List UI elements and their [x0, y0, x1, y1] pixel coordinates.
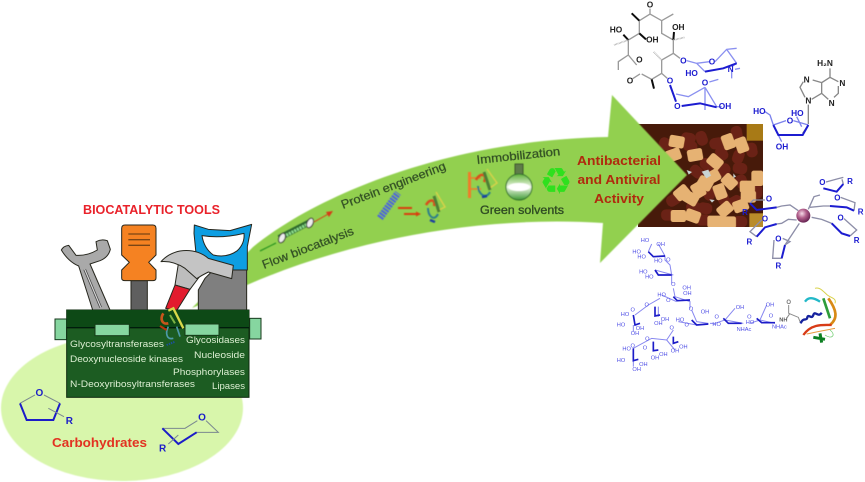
- chart: glycoprotein glycan tree: OH: [679, 344, 688, 350]
- chart: protein ribbon conjugate: [779, 288, 835, 343]
- icon: pyranose ring: O: [198, 413, 206, 424]
- chart: glycoprotein glycan tree: OH: [636, 326, 644, 332]
- chart: glycoprotein glycan tree: HO: [639, 269, 648, 275]
- chart: glycoprotein glycan tree: O: [747, 314, 752, 320]
- chart: glycoprotein glycan tree: OH: [736, 305, 744, 311]
- chart: adenosine nucleoside molecule: N: [804, 75, 810, 85]
- chart: macrolide antibiotic molecule: O: [709, 57, 716, 67]
- chart: adenosine nucleoside molecule: HO: [791, 108, 804, 118]
- chart: multivalent glycoconjugate: O: [766, 194, 772, 203]
- chart: glycoprotein glycan tree: O: [630, 343, 635, 349]
- chart: glycoprotein glycan tree: HO: [641, 238, 650, 244]
- chart: macrolide antibiotic molecule: N: [728, 64, 734, 74]
- heading: antibacterial and antiviral activity: Antibacterial: [577, 154, 661, 168]
- heading: antibacterial and antiviral activity: Activity: [594, 192, 644, 206]
- chart: macrolide antibiotic molecule: O: [680, 55, 687, 65]
- heading: antibacterial and antiviral activity: and Antiviral: [578, 173, 660, 187]
- text block: enzyme names: N-Deoxyribosyltransferases: [70, 379, 195, 390]
- label: immobilization: Immobilization: [476, 144, 561, 167]
- chart: glycoprotein glycan tree: OH: [632, 367, 641, 373]
- text block: enzyme names: [70, 335, 245, 392]
- chart: multivalent glycoconjugate: O: [838, 214, 844, 223]
- chart: glycoprotein glycan tree: O: [769, 314, 774, 320]
- icon: furanose ring: O: [35, 388, 43, 399]
- chart: glycoprotein glycan tree: HO: [622, 347, 632, 353]
- chart: adenosine nucleoside molecule: H₂N: [817, 58, 833, 68]
- chart: glycoprotein glycan tree: O: [666, 298, 671, 304]
- chart: glycoprotein glycan tree: OH: [656, 242, 665, 248]
- chart: multivalent glycoconjugate: O: [819, 178, 825, 187]
- chart: glycoprotein glycan tree: NHAc: [737, 327, 752, 333]
- chart: multivalent glycoconjugate: R: [742, 208, 748, 217]
- text block: enzyme names: Phosphorylases: [173, 367, 245, 378]
- chart: macrolide antibiotic molecule: [610, 0, 740, 111]
- icon: enzyme on toolbox: [160, 308, 183, 345]
- icon: hammer: [161, 251, 233, 311]
- chart: glycoprotein glycan tree: O: [684, 323, 689, 329]
- chart: multivalent glycoconjugate: R: [775, 262, 781, 271]
- chart: glycoprotein glycan tree: HO: [632, 249, 642, 255]
- chart: glycoprotein glycan tree: O: [669, 325, 674, 331]
- chart: protein ribbon conjugate: NH: [779, 317, 787, 323]
- chart: glycoprotein glycan tree: O: [644, 303, 649, 309]
- chart: macrolide antibiotic molecule: O: [627, 75, 634, 85]
- label: flow biocatalysis: Flow biocatalysis: [260, 224, 356, 272]
- chart: multivalent glycoconjugate: R: [847, 177, 853, 186]
- chart: adenosine nucleoside molecule: O: [787, 116, 794, 126]
- chart: glycoprotein glycan tree: HO: [617, 323, 626, 329]
- icon: green solvent flask: [506, 164, 532, 200]
- chart: protein ribbon conjugate: O: [786, 300, 791, 306]
- chart: macrolide antibiotic molecule: OH: [719, 101, 731, 111]
- chart: adenosine nucleoside molecule: OH: [776, 142, 788, 152]
- icon: furanose ring: [20, 388, 73, 427]
- chart: adenosine nucleoside molecule: N: [839, 78, 845, 88]
- chart: glycoprotein glycan tree: O: [630, 308, 635, 314]
- icon: furanose ring: R: [66, 416, 73, 427]
- heading: biocatalytic tools: BIOCATALYTIC TOOLS: [83, 203, 220, 217]
- chart: macrolide antibiotic molecule: O: [667, 75, 674, 85]
- chart: glycoprotein glycan tree: HO: [657, 293, 667, 299]
- text block: enzyme names: Lipases: [212, 381, 245, 392]
- icon: flow reactor tube: [260, 211, 333, 251]
- icon: recycling symbol: ♻: [539, 160, 573, 203]
- chart: glycoprotein glycan tree: HO: [621, 312, 630, 318]
- chart: glycoprotein glycan tree: O: [643, 345, 648, 351]
- text block: enzyme names: Nucleoside: [194, 350, 245, 361]
- label: protein engineering: Protein engineering: [339, 159, 448, 212]
- chart: macrolide antibiotic molecule: OH: [646, 35, 659, 45]
- chart: adenosine nucleoside molecule: [753, 58, 845, 152]
- chart: glycoprotein glycan tree: HO: [637, 254, 647, 260]
- chart: glycoprotein glycan tree: O: [666, 258, 671, 264]
- chart: glycoprotein glycan tree: O: [671, 282, 676, 288]
- icon: wrench: [61, 240, 110, 310]
- text block: enzyme names: Deoxynucleoside kinases: [70, 354, 183, 365]
- chart: glycoprotein glycan tree: OH: [701, 309, 709, 315]
- chart: glycoprotein glycan tree: HO: [617, 358, 626, 364]
- chart: glycoprotein glycan tree: OH: [683, 291, 692, 297]
- main curved arrow: [192, 95, 687, 308]
- chart: glycoprotein glycan tree: O: [689, 307, 694, 313]
- chart: glycoprotein glycan tree: OH: [654, 321, 663, 327]
- chart: macrolide antibiotic molecule: O: [702, 77, 709, 87]
- chart: multivalent glycoconjugate: R: [854, 236, 860, 245]
- chart: adenosine nucleoside molecule: HO: [753, 106, 766, 116]
- icon: toolbox tools: [61, 224, 252, 311]
- chart: macrolide antibiotic molecule: HO: [685, 68, 698, 78]
- panel: toolbox: [55, 310, 261, 397]
- chart: glycoprotein glycan tree: OH: [671, 349, 679, 355]
- panel: capsules photograph: [638, 124, 763, 228]
- chart: glycoprotein glycan tree: HO: [676, 318, 685, 324]
- chart: multivalent glycoconjugate: O: [834, 193, 840, 202]
- chart: macrolide antibiotic molecule: HO: [610, 25, 623, 35]
- icon: pyranose ring: [159, 413, 218, 454]
- heading: antibacterial and antiviral activity: [577, 154, 661, 206]
- label: carbohydrates: Carbohydrates: [52, 435, 147, 450]
- chart: multivalent glycoconjugate: [742, 177, 864, 271]
- chart: glycoprotein glycan tree: HO: [645, 274, 654, 280]
- chart: macrolide antibiotic molecule: O: [674, 101, 681, 111]
- chart: adenosine nucleoside molecule: N: [805, 95, 811, 105]
- chart: glycoprotein glycan tree: [617, 238, 787, 373]
- chart: glycoprotein glycan tree: OH: [631, 331, 639, 337]
- chart: glycoprotein glycan tree: HO: [746, 320, 755, 326]
- icon: screwdriver: [122, 225, 156, 311]
- chart: glycoprotein glycan tree: OH: [661, 317, 669, 323]
- chart: glycoprotein glycan tree: OH: [651, 355, 659, 361]
- icon: saw: [194, 224, 252, 310]
- icon: immobilized enzyme: [468, 169, 497, 198]
- chart: multivalent glycoconjugate: O: [762, 214, 768, 223]
- chart: macrolide antibiotic molecule: OH: [672, 22, 685, 32]
- chart: glycoprotein glycan tree: OH: [766, 303, 774, 309]
- chart: multivalent glycoconjugate: R: [746, 237, 752, 246]
- icon: protein engineering equilibrium: [380, 192, 445, 222]
- chart: multivalent glycoconjugate: O: [775, 234, 781, 243]
- icon: pyranose ring: R: [159, 443, 166, 454]
- toolbox body: [67, 310, 249, 397]
- chart: glycoprotein glycan tree: O: [714, 315, 719, 321]
- chart: glycoprotein glycan tree: HO: [712, 322, 722, 328]
- chart: glycoprotein glycan tree: HO: [654, 259, 663, 265]
- chart: adenosine nucleoside molecule: N: [829, 98, 835, 108]
- label: green solvents: Green solvents: [480, 205, 564, 217]
- carbohydrate ellipse background: [1, 335, 243, 481]
- chart: glycoprotein glycan tree: OH: [639, 362, 648, 368]
- icon: toolbox handles: [55, 318, 261, 340]
- chart: glycoprotein glycan tree: NHAc: [772, 324, 787, 330]
- chart: macrolide antibiotic molecule: O: [636, 55, 643, 65]
- text block: enzyme names: Glycosyltransferases: [70, 339, 164, 350]
- text block: enzyme names: Glycosidases: [186, 335, 245, 346]
- chart: glycoprotein glycan tree: OH: [659, 352, 668, 358]
- chart: glycoprotein glycan tree: O: [645, 337, 650, 343]
- icon: toolbox latches: [95, 324, 219, 336]
- chart: multivalent glycoconjugate: R: [858, 207, 864, 216]
- chart: glycoprotein glycan tree: OH: [682, 285, 691, 291]
